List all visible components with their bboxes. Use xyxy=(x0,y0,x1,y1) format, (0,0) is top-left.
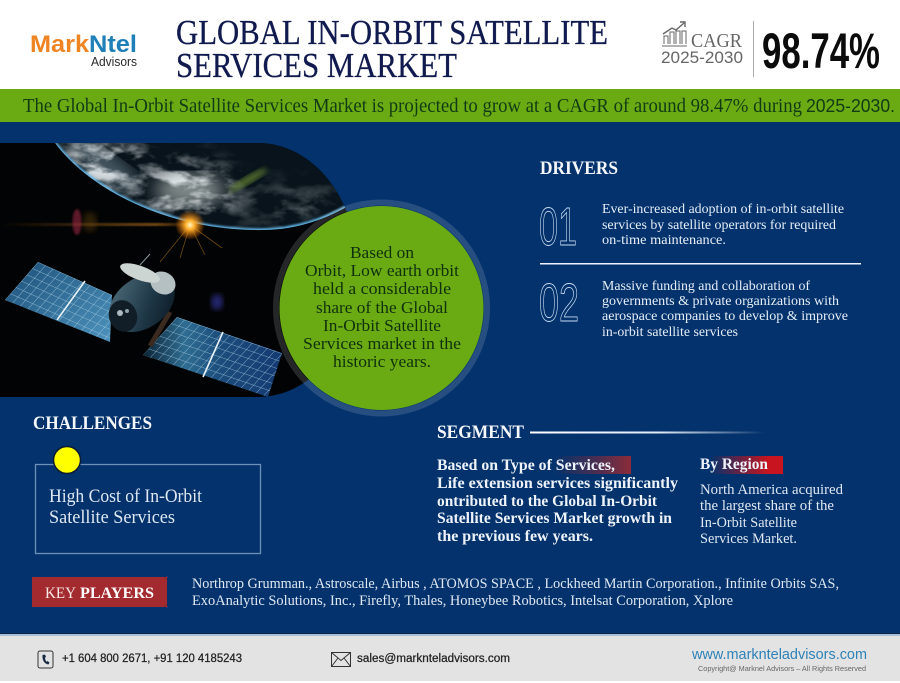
icon: phone xyxy=(38,651,53,668)
logo: MarkNtel Advisors: Advisors xyxy=(91,55,137,69)
email: sales@marknteladvisors.com xyxy=(357,653,510,665)
challenge text: Satellite Services xyxy=(49,507,175,528)
panel: drivers xyxy=(539,158,861,340)
players list xyxy=(192,576,839,609)
green summary band: The Global In-Orbit Satellite Services Market is projected to grow at a CAGR of around 98.47% during xyxy=(23,95,802,117)
satellite and earth image xyxy=(0,143,347,397)
segment by type text: Based on Type of Services, xyxy=(437,457,615,474)
callout: orbit share: held a considerable xyxy=(313,279,451,298)
segment by type text xyxy=(437,457,678,545)
navy main panel xyxy=(0,122,900,634)
title: SERVICES MARKET xyxy=(176,46,457,85)
highlight: type of services xyxy=(553,456,631,474)
title: GLOBAL IN-ORBIT SATELLITE xyxy=(176,13,608,52)
driver 2 text: Massive funding and collaboration of xyxy=(602,279,810,294)
segment by type text: Satellite Services Market growth in xyxy=(437,510,672,527)
left solar panel xyxy=(5,262,112,342)
CAGR label xyxy=(661,30,743,67)
by region text: North America acquired xyxy=(700,482,844,498)
challenge text xyxy=(49,486,203,528)
segment by type text: the previous few years. xyxy=(437,528,593,545)
callout: orbit share: In-Orbit Satellite xyxy=(323,316,441,335)
earth xyxy=(55,143,345,230)
segment by type text: ontributed to the Global In-Orbit xyxy=(437,493,658,510)
players list: ExoAnalytic Solutions, Inc., Firefly, Thales, Honeybee Robotics, Intelsat Corporation, Xplore xyxy=(192,593,733,609)
driver 1 text: on-time maintenance. xyxy=(602,233,726,248)
heading: challenges: CHALLENGES xyxy=(33,413,152,434)
driver 2 text: in-orbit satellite services xyxy=(602,325,738,340)
number 02: 02 xyxy=(539,273,579,333)
heading: drivers: DRIVERS xyxy=(540,158,618,179)
CAGR label: CAGR xyxy=(691,30,743,52)
driver 1 text: Ever-increased adoption of in-orbit satellite xyxy=(602,202,844,217)
by region text: Services Market. xyxy=(700,531,797,547)
driver 2 text: governments & private organizations with xyxy=(602,294,839,309)
website: www.marknteladvisors.com xyxy=(691,646,867,663)
phone numbers: +1 604 800 2671, +91 120 4185243 xyxy=(62,653,242,665)
footer xyxy=(0,633,900,681)
icon: yellow dot xyxy=(54,446,80,474)
driver 1 text: services by satellite operators for required xyxy=(602,218,836,233)
satellite body xyxy=(108,254,176,348)
green summary band: 2025-2030. xyxy=(806,96,895,116)
by region text: the largest share of the xyxy=(700,498,834,514)
logo: MarkNtel Advisors: Ntel xyxy=(89,31,137,58)
driver 1 text xyxy=(602,202,844,248)
badge: key players: PLAYERS xyxy=(80,585,154,602)
by region heading: By Region xyxy=(700,456,768,473)
callout: orbit share: historic years. xyxy=(333,352,431,371)
badge: key players xyxy=(32,577,167,607)
players list: Northrop Grumman., Astroscale, Airbus , ATOMOS SPACE , Lockheed Martin Corporation., Infinite Orbits SAS, xyxy=(192,576,839,592)
callout: orbit share: Based on xyxy=(350,243,415,262)
CAGR label: 2025-2030 xyxy=(661,48,743,67)
logo: MarkNtel Advisors: Mark xyxy=(30,31,90,58)
by region text: In-Orbit Satellite xyxy=(700,515,797,531)
panel: challenges xyxy=(33,413,260,554)
callout: orbit share xyxy=(276,202,487,414)
copyright: Copyright@ Marknel Advisors – All Rights Reserved xyxy=(698,664,866,673)
callout: orbit share: Services market in the xyxy=(303,334,461,353)
logo: MarkNtel Advisors xyxy=(30,31,137,69)
number 01: 01 xyxy=(539,197,577,257)
driver 2 text xyxy=(602,279,848,340)
heading: segment: SEGMENT xyxy=(437,422,524,443)
header xyxy=(30,13,880,85)
icon: growth chart xyxy=(662,22,687,46)
right solar panel xyxy=(143,317,282,397)
sun flare xyxy=(0,209,223,310)
title xyxy=(176,13,608,85)
callout: orbit share: Orbit, Low earth orbit xyxy=(305,261,459,280)
challenge box xyxy=(36,464,260,554)
highlight: by region xyxy=(710,456,783,474)
callout: orbit share: share of the Global xyxy=(316,298,448,317)
challenge text: High Cost of In-Orbit xyxy=(49,486,203,507)
driver 2 text: aerospace companies to develop & improve xyxy=(602,309,848,324)
green summary band xyxy=(0,89,900,122)
panel: segment xyxy=(437,422,844,547)
by region text xyxy=(700,482,844,547)
segment by type text: Life extension services significantly xyxy=(437,475,678,492)
divider line xyxy=(753,21,754,77)
panel: key players xyxy=(32,576,839,609)
icon: mail xyxy=(332,652,350,666)
badge: key players: KEY xyxy=(45,585,76,602)
